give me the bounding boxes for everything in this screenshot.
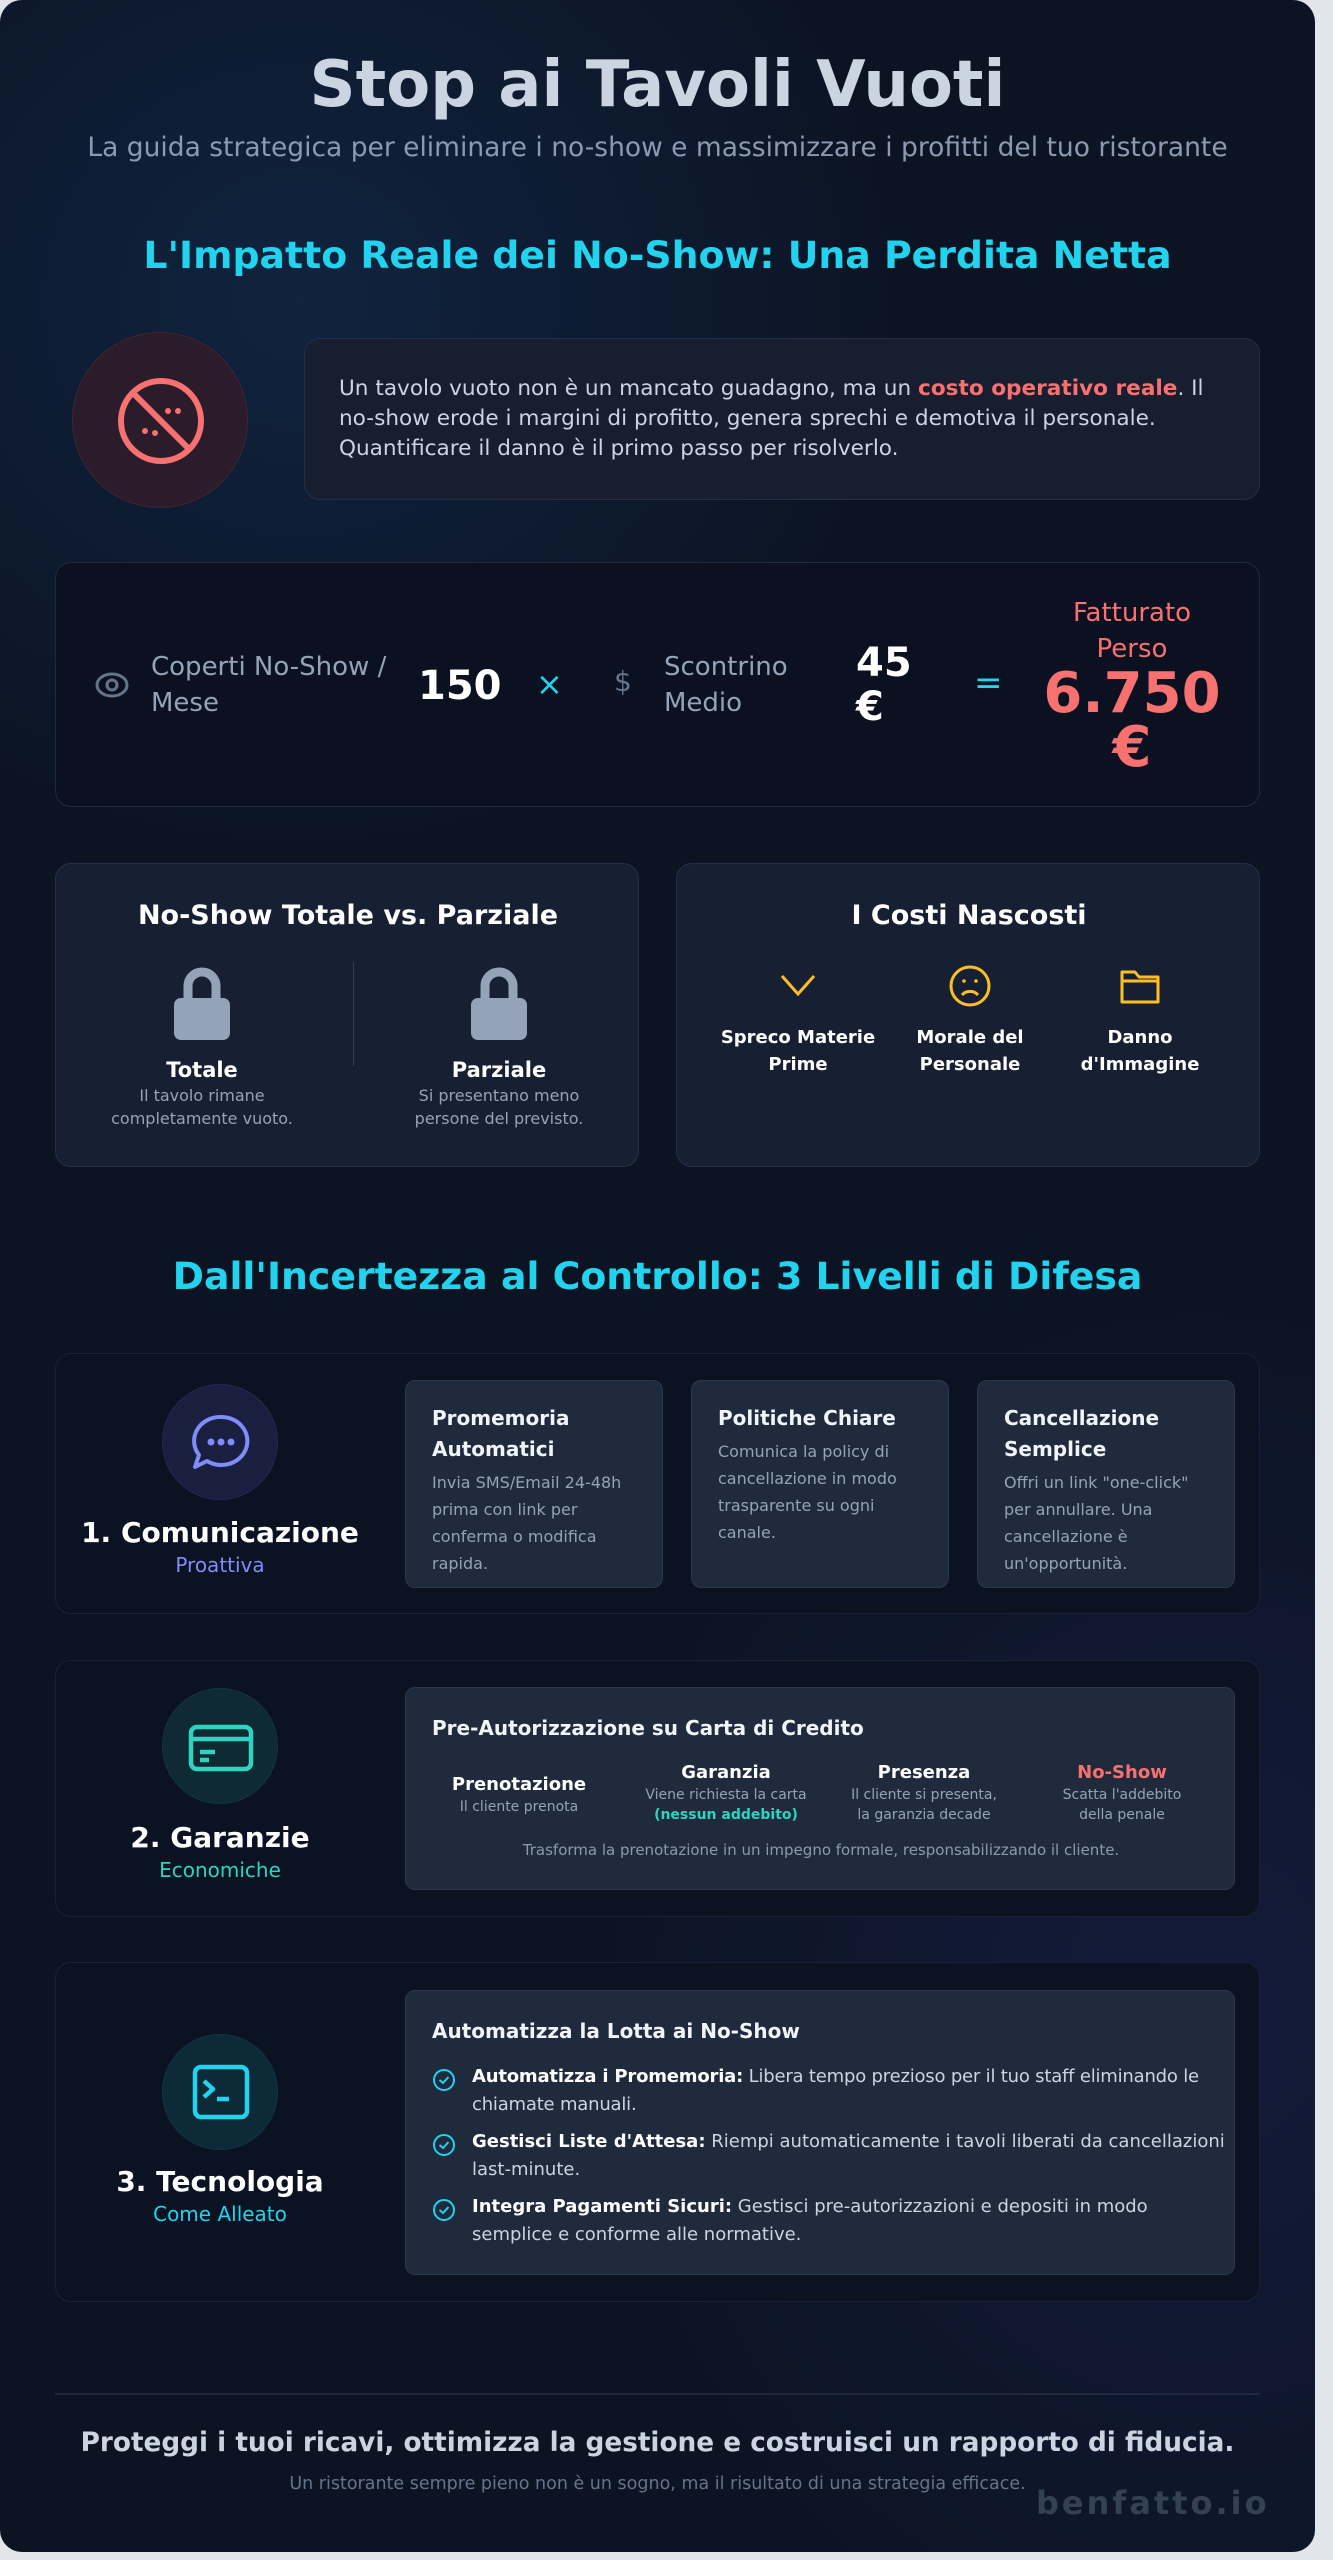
result xyxy=(1043,598,1221,780)
text block: intro: Un tavolo vuoto non è un mancato guadagno, ma un costo operativo reale. Il no-show erode i margini di profitto, genera sprechi e demotiva il personale. Quantificare il danno è il primo passo per risolverlo. xyxy=(339,376,1204,461)
panel title: I Costi Nascosti xyxy=(851,900,1087,931)
card: pre-autorizzazione: Trasforma la prenotazione in un impegno formale, responsabilizzando il cliente. xyxy=(523,1841,1119,1859)
text block: intro xyxy=(304,338,1260,500)
step: prenotazione: Prenotazione xyxy=(452,1774,586,1795)
level label xyxy=(116,2165,324,2226)
item: parziale: persone del previsto. xyxy=(415,1109,583,1128)
label: coperti xyxy=(151,652,386,718)
list item 3 xyxy=(433,2196,1148,2245)
result: € xyxy=(1113,715,1151,780)
value 150: 150 xyxy=(418,663,502,709)
operator x: × xyxy=(536,665,563,703)
panel: totale vs parziale xyxy=(55,863,639,1167)
label: scontrino: Medio xyxy=(664,688,742,718)
watermark: benfatto.io xyxy=(1036,2484,1270,2522)
step: no-show: della penale xyxy=(1079,1807,1165,1823)
card: cancellazione: Offri un link "one-click" per annullare. Una cancellazione è un'opportunità. xyxy=(1004,1473,1188,1573)
item: immagine xyxy=(1081,970,1199,1075)
card: promemoria: Promemoria xyxy=(432,1406,569,1430)
value 45: 45 xyxy=(856,640,912,686)
card: cancellazione: Semplice xyxy=(1004,1437,1106,1461)
item: totale xyxy=(111,968,293,1128)
icon: chat xyxy=(162,1384,278,1500)
label: coperti: Mese xyxy=(151,688,219,718)
card: automatizza: Automatizza la Lotta ai No-Show xyxy=(432,2019,800,2043)
step: presenza xyxy=(851,1762,997,1823)
item: spreco xyxy=(721,975,875,1075)
list item 3: Integra Pagamenti Sicuri: Gestisci pre-autorizzazioni e depositi in modo xyxy=(472,2196,1148,2217)
card: pre-autorizzazione xyxy=(405,1687,1235,1890)
footer headline: Proteggi i tuoi ricavi, ottimizza la gestione e costruisci un rapporto di fiducia. xyxy=(81,2428,1234,2458)
step: presenza: la garanzia decade xyxy=(857,1807,991,1823)
item: parziale: Si presentano meno xyxy=(419,1086,579,1105)
list item 3: semplice e conforme alle normative. xyxy=(472,2224,801,2245)
card: promemoria xyxy=(405,1380,663,1588)
operator =: = xyxy=(974,663,1002,703)
panel: costi nascosti xyxy=(676,863,1260,1167)
card: promemoria: Invia SMS/Email 24-48h prima con link per conferma o modifica rapida. xyxy=(432,1473,621,1573)
result: 6.750 xyxy=(1043,661,1221,726)
card: politiche xyxy=(691,1380,949,1588)
item: totale: Totale xyxy=(166,1058,238,1082)
item: totale: completamente vuoto. xyxy=(111,1109,293,1128)
level 1: comunicazione xyxy=(55,1353,1260,1614)
level label xyxy=(81,1516,359,1577)
label: scontrino: Scontrino xyxy=(664,652,788,682)
section heading: impatto: L'Impatto Reale dei No-Show: Una Perdita Netta xyxy=(143,233,1172,277)
card: politiche: Comunica la policy di cancellazione in modo trasparente su ogni canale. xyxy=(718,1442,897,1542)
step: garanzia: Garanzia xyxy=(681,1762,771,1783)
level label: Economiche xyxy=(159,1858,281,1882)
step: no-show: Scatta l'addebito xyxy=(1063,1787,1181,1803)
panel title: No-Show Totale vs. Parziale xyxy=(138,900,558,931)
item: parziale xyxy=(415,968,583,1128)
item: morale: Morale del xyxy=(916,1027,1024,1048)
step: presenza: Il cliente si presenta, xyxy=(851,1787,997,1803)
card: politiche: Politiche Chiare xyxy=(718,1406,896,1430)
level label: Come Alleato xyxy=(153,2202,287,2226)
item: totale: Il tavolo rimane xyxy=(139,1086,265,1105)
title: Stop ai Tavoli Vuoti xyxy=(310,48,1005,122)
label: scontrino xyxy=(664,652,788,718)
panel: calcolo xyxy=(55,562,1260,807)
icon: eye xyxy=(96,672,128,698)
icon: no food xyxy=(72,332,248,508)
item: spreco: Spreco Materie xyxy=(721,1027,875,1048)
level label xyxy=(130,1821,310,1882)
icon: credit card xyxy=(162,1688,278,1804)
item: spreco: Prime xyxy=(768,1054,828,1075)
card: automatizza xyxy=(405,1990,1235,2275)
value 45: € xyxy=(856,684,884,730)
item: immagine: Danno xyxy=(1107,1027,1173,1048)
list item 1: Automatizza i Promemoria: Libera tempo prezioso per il tuo staff eliminando le chiamate manuali. xyxy=(472,2066,1199,2115)
label: coperti: Coperti No-Show / xyxy=(151,652,386,682)
card: cancellazione: Cancellazione xyxy=(1004,1406,1159,1430)
footer subline: Un ristorante sempre pieno non è un sogno, ma il risultato di una strategia efficace. xyxy=(289,2474,1026,2494)
section heading: livelli: Dall'Incertezza al Controllo: 3 Livelli di Difesa xyxy=(173,1254,1142,1298)
level label: 3. Tecnologia xyxy=(116,2165,324,2198)
step: garanzia: Viene richiesta la carta xyxy=(645,1787,807,1803)
step: prenotazione: Il cliente prenota xyxy=(460,1799,578,1815)
card: cancellazione xyxy=(977,1380,1235,1588)
step: garanzia: (nessun addebito) xyxy=(654,1807,798,1823)
step: presenza: Presenza xyxy=(878,1762,970,1783)
icon: dollar: $ xyxy=(614,665,632,698)
icon: terminal xyxy=(162,2034,278,2150)
list item 2: Gestisci Liste d'Attesa: Riempi automaticamente i tavoli liberati da cancellazioni last-minute. xyxy=(472,2131,1225,2180)
level label: 1. Comunicazione xyxy=(81,1516,359,1549)
item: morale: Personale xyxy=(920,1054,1020,1075)
step: no-show: No-Show xyxy=(1077,1762,1167,1783)
subtitle: La guida strategica per eliminare i no-show e massimizzare i profitti del tuo ristorante xyxy=(87,132,1228,163)
result: Fatturato xyxy=(1073,598,1191,628)
item: immagine: d'Immagine xyxy=(1081,1054,1199,1075)
card: promemoria: Automatici xyxy=(432,1437,554,1461)
step: no-show xyxy=(1063,1762,1181,1823)
item: morale xyxy=(916,966,1024,1075)
level label: Proattiva xyxy=(175,1553,265,1577)
step: garanzia xyxy=(645,1762,807,1823)
item: parziale: Parziale xyxy=(452,1058,546,1082)
card: pre-autorizzazione: Pre-Autorizzazione su Carta di Credito xyxy=(432,1716,864,1740)
level 2: garanzie xyxy=(55,1660,1260,1917)
value 45 xyxy=(855,640,912,730)
level label: 2. Garanzie xyxy=(130,1821,310,1854)
level 3: tecnologia xyxy=(55,1962,1260,2302)
result: Perso xyxy=(1097,634,1167,664)
step: prenotazione xyxy=(452,1774,586,1815)
